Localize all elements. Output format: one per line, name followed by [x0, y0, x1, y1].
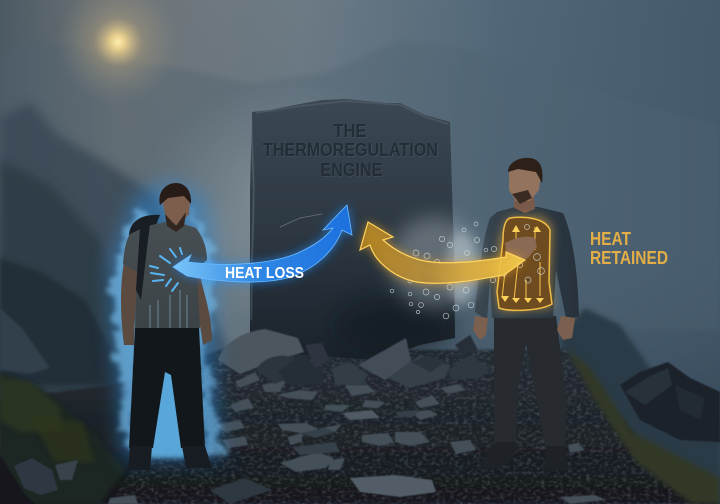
icon: glowing heat panel: [496, 216, 552, 311]
path stones: [108, 372, 606, 504]
hand on chest: [505, 237, 537, 261]
background: right hillside: [560, 308, 720, 504]
boots: [128, 446, 152, 470]
monolith title: THE: [334, 122, 367, 142]
blue arrow: heat loss: [173, 205, 352, 282]
monolith: [250, 99, 455, 360]
neck: [514, 196, 535, 213]
icon: chest heat-loss dashes: [150, 248, 182, 291]
arrow label: heat loss: HEAT LOSS: [225, 265, 304, 282]
monolith title: ENGINE: [320, 160, 382, 180]
backpack: [128, 215, 160, 300]
pants: [129, 328, 205, 448]
label: heat retained: HEAT: [590, 229, 631, 249]
background: left mountain slopes: [0, 102, 245, 420]
gold arrow: heat retained: [360, 222, 525, 283]
label: heat retained: RETAINED: [590, 248, 668, 268]
monolith title: THERMOREGULATION: [264, 140, 438, 160]
legs: [494, 316, 567, 450]
monolith title: THE: [334, 121, 366, 141]
arms: [121, 262, 140, 345]
ground and rocky path: [0, 348, 720, 504]
right hiker figure: heat retained: [473, 158, 579, 470]
icon: blue energy aura: [108, 180, 222, 462]
left hiker figure: heat loss: [108, 180, 222, 470]
long sleeve torso: [475, 207, 579, 320]
mist cloud and particles: [390, 217, 544, 319]
label: heat retained: [590, 229, 668, 268]
monolith title: THERMOREGULATION: [263, 140, 438, 160]
wet t-shirt: [123, 222, 207, 328]
hands: [473, 316, 488, 340]
boots: [482, 442, 516, 468]
head: [161, 189, 190, 226]
drip lines: [150, 290, 187, 362]
right dark boulder: [620, 362, 720, 442]
monolith title: [263, 121, 438, 180]
head: [509, 163, 541, 201]
boulders at monolith base: [218, 329, 490, 388]
left foreground rocks: [0, 455, 78, 504]
monolith title: ENGINE: [321, 160, 383, 180]
